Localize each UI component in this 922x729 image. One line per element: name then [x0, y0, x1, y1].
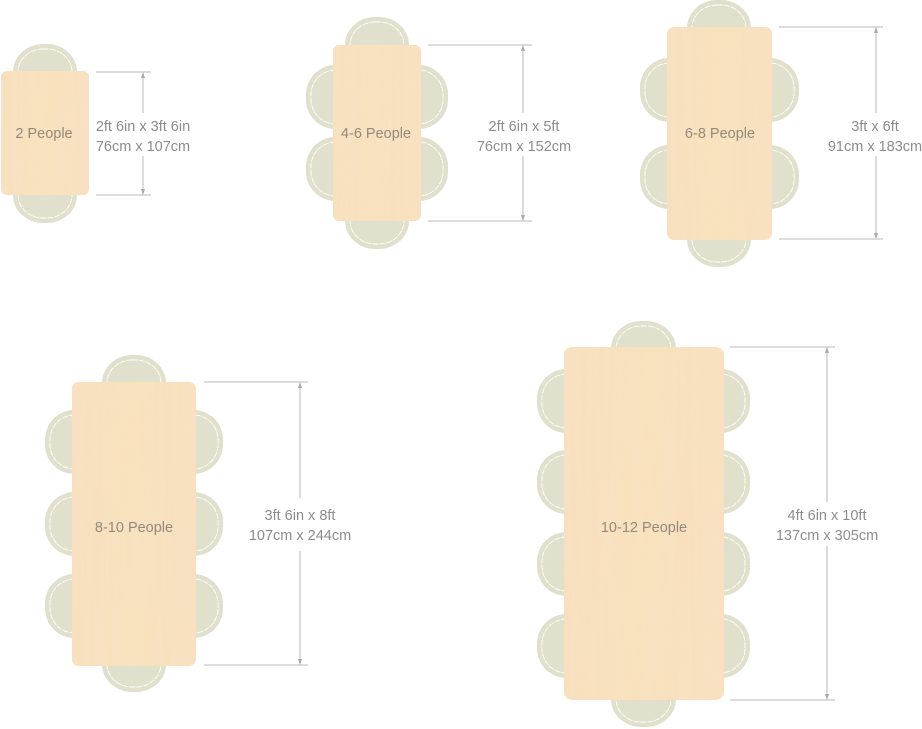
dimension text: 3ft 6in x 8ft: [265, 508, 335, 524]
chairs: right side: [384, 65, 448, 201]
chair: bottom: [687, 207, 751, 267]
chairs: left side: [306, 65, 370, 201]
table group: 10-12 people: [537, 321, 878, 727]
dimension arrow: [204, 382, 308, 665]
table group: 2 people: [1, 44, 190, 223]
dimension text: 137cm x 305cm: [776, 528, 878, 544]
dimension text: 4ft 6in x 10ft: [788, 508, 866, 524]
table top: [564, 347, 724, 700]
chair: bottom: [345, 189, 409, 249]
chair: top: [687, 0, 751, 60]
chairs: right side: [159, 410, 223, 638]
chair: top: [611, 321, 676, 381]
chair: top: [345, 17, 409, 77]
table group: 8-10 people: [45, 355, 351, 692]
dimension text: 3ft x 6ft: [851, 119, 899, 135]
chairs: right side: [686, 369, 750, 678]
chair: bottom: [102, 632, 166, 692]
label: 8-10 People: 8-10 People: [95, 520, 173, 536]
chair: top: [102, 355, 166, 415]
dimension text: 76cm x 152cm: [477, 139, 571, 155]
dimension arrow: [779, 27, 883, 239]
dimension text: 91cm x 183cm: [828, 139, 922, 155]
dimension text: 2ft 6in x 5ft: [489, 119, 559, 135]
dimension text: 76cm x 107cm: [96, 139, 190, 155]
table top: [333, 45, 421, 221]
chairs: right side: [735, 58, 799, 209]
chairs: left side: [537, 369, 601, 678]
table top: [667, 27, 772, 240]
chairs: left side: [45, 410, 109, 638]
dimension arrow: [730, 347, 835, 700]
dimension text: 107cm x 244cm: [249, 528, 351, 544]
chair: bottom: [13, 163, 77, 223]
dimension arrow: [428, 45, 532, 221]
label: 10-12 People: 10-12 People: [601, 520, 687, 536]
label: 2 People: 2 People: [15, 126, 73, 142]
label: 4-6 People: 4-6 People: [341, 126, 411, 142]
table top: [1, 71, 89, 195]
dimension text: 2ft 6in x 3ft 6in: [96, 119, 190, 135]
chairs: left side: [640, 58, 704, 209]
label: 6-8 People: 6-8 People: [685, 126, 755, 142]
chair: top: [13, 44, 77, 104]
table top: [72, 382, 196, 666]
dimension arrow: [96, 72, 151, 195]
table group: 6-8 people: [640, 0, 922, 267]
chair: bottom: [611, 667, 676, 727]
table group: 4-6 people: [306, 17, 571, 249]
